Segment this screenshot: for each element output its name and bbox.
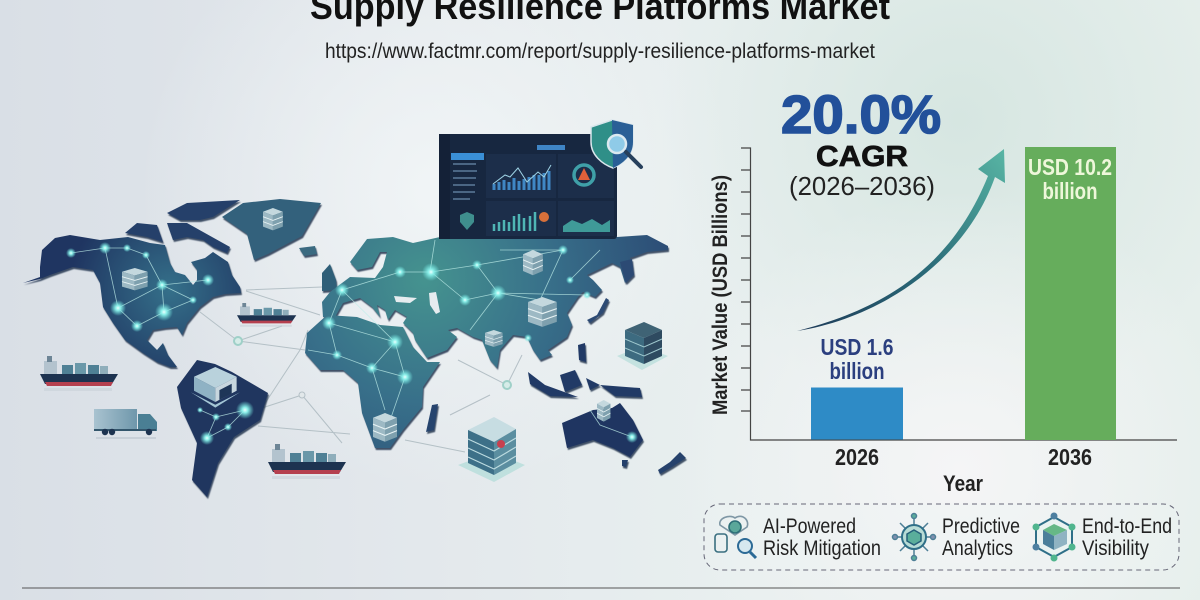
dashboard panel (439, 134, 617, 239)
network links (71, 240, 632, 438)
dashboard bars (486, 201, 556, 236)
icon: shield with magnifier (591, 120, 641, 168)
growth stat: 20.0%: 20.0% (781, 85, 941, 145)
text: ai-powered risk mitigation: Risk Mitigation (763, 537, 881, 560)
icon: warehouse south america (191, 367, 240, 408)
icon: ship pacific (40, 356, 118, 391)
x axis title: Year (943, 471, 983, 496)
glowing nodes (66, 242, 638, 445)
icon: server north america (122, 268, 148, 290)
text: ai-powered risk mitigation: AI-Powered (763, 515, 856, 538)
tasmania (622, 460, 628, 467)
text: end-to-end visibility: End-to-End (1082, 515, 1172, 538)
icon: ship south atlantic (268, 444, 346, 479)
greenland (222, 199, 321, 260)
icon: end-to-end visibility (1032, 512, 1076, 562)
great britain (322, 264, 337, 291)
background network lines (200, 287, 522, 452)
sea cutouts (394, 292, 440, 314)
value label 2036: billion (1042, 178, 1098, 204)
source url: https://www.factmr.com/report/supply-resilience-platforms-market (325, 40, 875, 63)
text: predictive analytics: Predictive (942, 515, 1020, 538)
dashboard top bar (537, 145, 565, 150)
value label 2026: billion (830, 358, 884, 384)
dashboard risk gauge (558, 154, 614, 198)
southeast asia islands (528, 343, 642, 397)
dashboard area chart (558, 201, 614, 236)
icon: server greenland (263, 208, 283, 230)
bar: 2036 (1025, 147, 1116, 440)
icon: predictive analytics (892, 514, 936, 560)
bar chart (709, 147, 1177, 496)
cagr period: (2026–2036) (789, 171, 935, 201)
iceland (299, 246, 317, 256)
y axis label: Market Value (USD Billions) (709, 175, 732, 415)
icon: server africa (373, 413, 397, 442)
x label 2036: 2036 (1048, 444, 1092, 470)
continents (23, 199, 686, 497)
dashboard line and bar chart (486, 154, 556, 198)
icon: server rack right (617, 322, 668, 370)
icon: server australia (597, 400, 610, 422)
value label 2036: USD 10.2 (1028, 154, 1112, 180)
icon: ship atlantic (237, 303, 296, 327)
axes and ticks (741, 148, 1177, 440)
icon: server rack front (458, 417, 525, 482)
bar: 2026 (811, 388, 903, 440)
australia (562, 403, 643, 457)
dashboard sidebar (439, 134, 484, 239)
cagr label: CAGR (816, 141, 908, 173)
icon: server china (528, 297, 557, 327)
growth arrow (797, 149, 1005, 331)
text: end-to-end visibility: Visibility (1082, 537, 1149, 560)
icon: server russia (523, 250, 543, 275)
arctic islands (125, 200, 240, 253)
icon: server india (485, 330, 503, 347)
south america (177, 360, 268, 497)
x label 2026: 2026 (835, 444, 879, 470)
north america (23, 235, 241, 367)
text: predictive analytics: Analytics (942, 537, 1013, 560)
eurasia (322, 235, 668, 368)
new zealand (658, 452, 686, 474)
value label 2026: USD 1.6 (820, 334, 894, 360)
legend panel (704, 504, 1179, 570)
sakhalin (620, 259, 634, 283)
japan (587, 298, 609, 323)
icon: ai risk mitigation (715, 516, 756, 558)
icon: truck (94, 409, 157, 439)
africa (305, 315, 440, 448)
madagascar (426, 404, 438, 432)
world map (23, 199, 686, 497)
